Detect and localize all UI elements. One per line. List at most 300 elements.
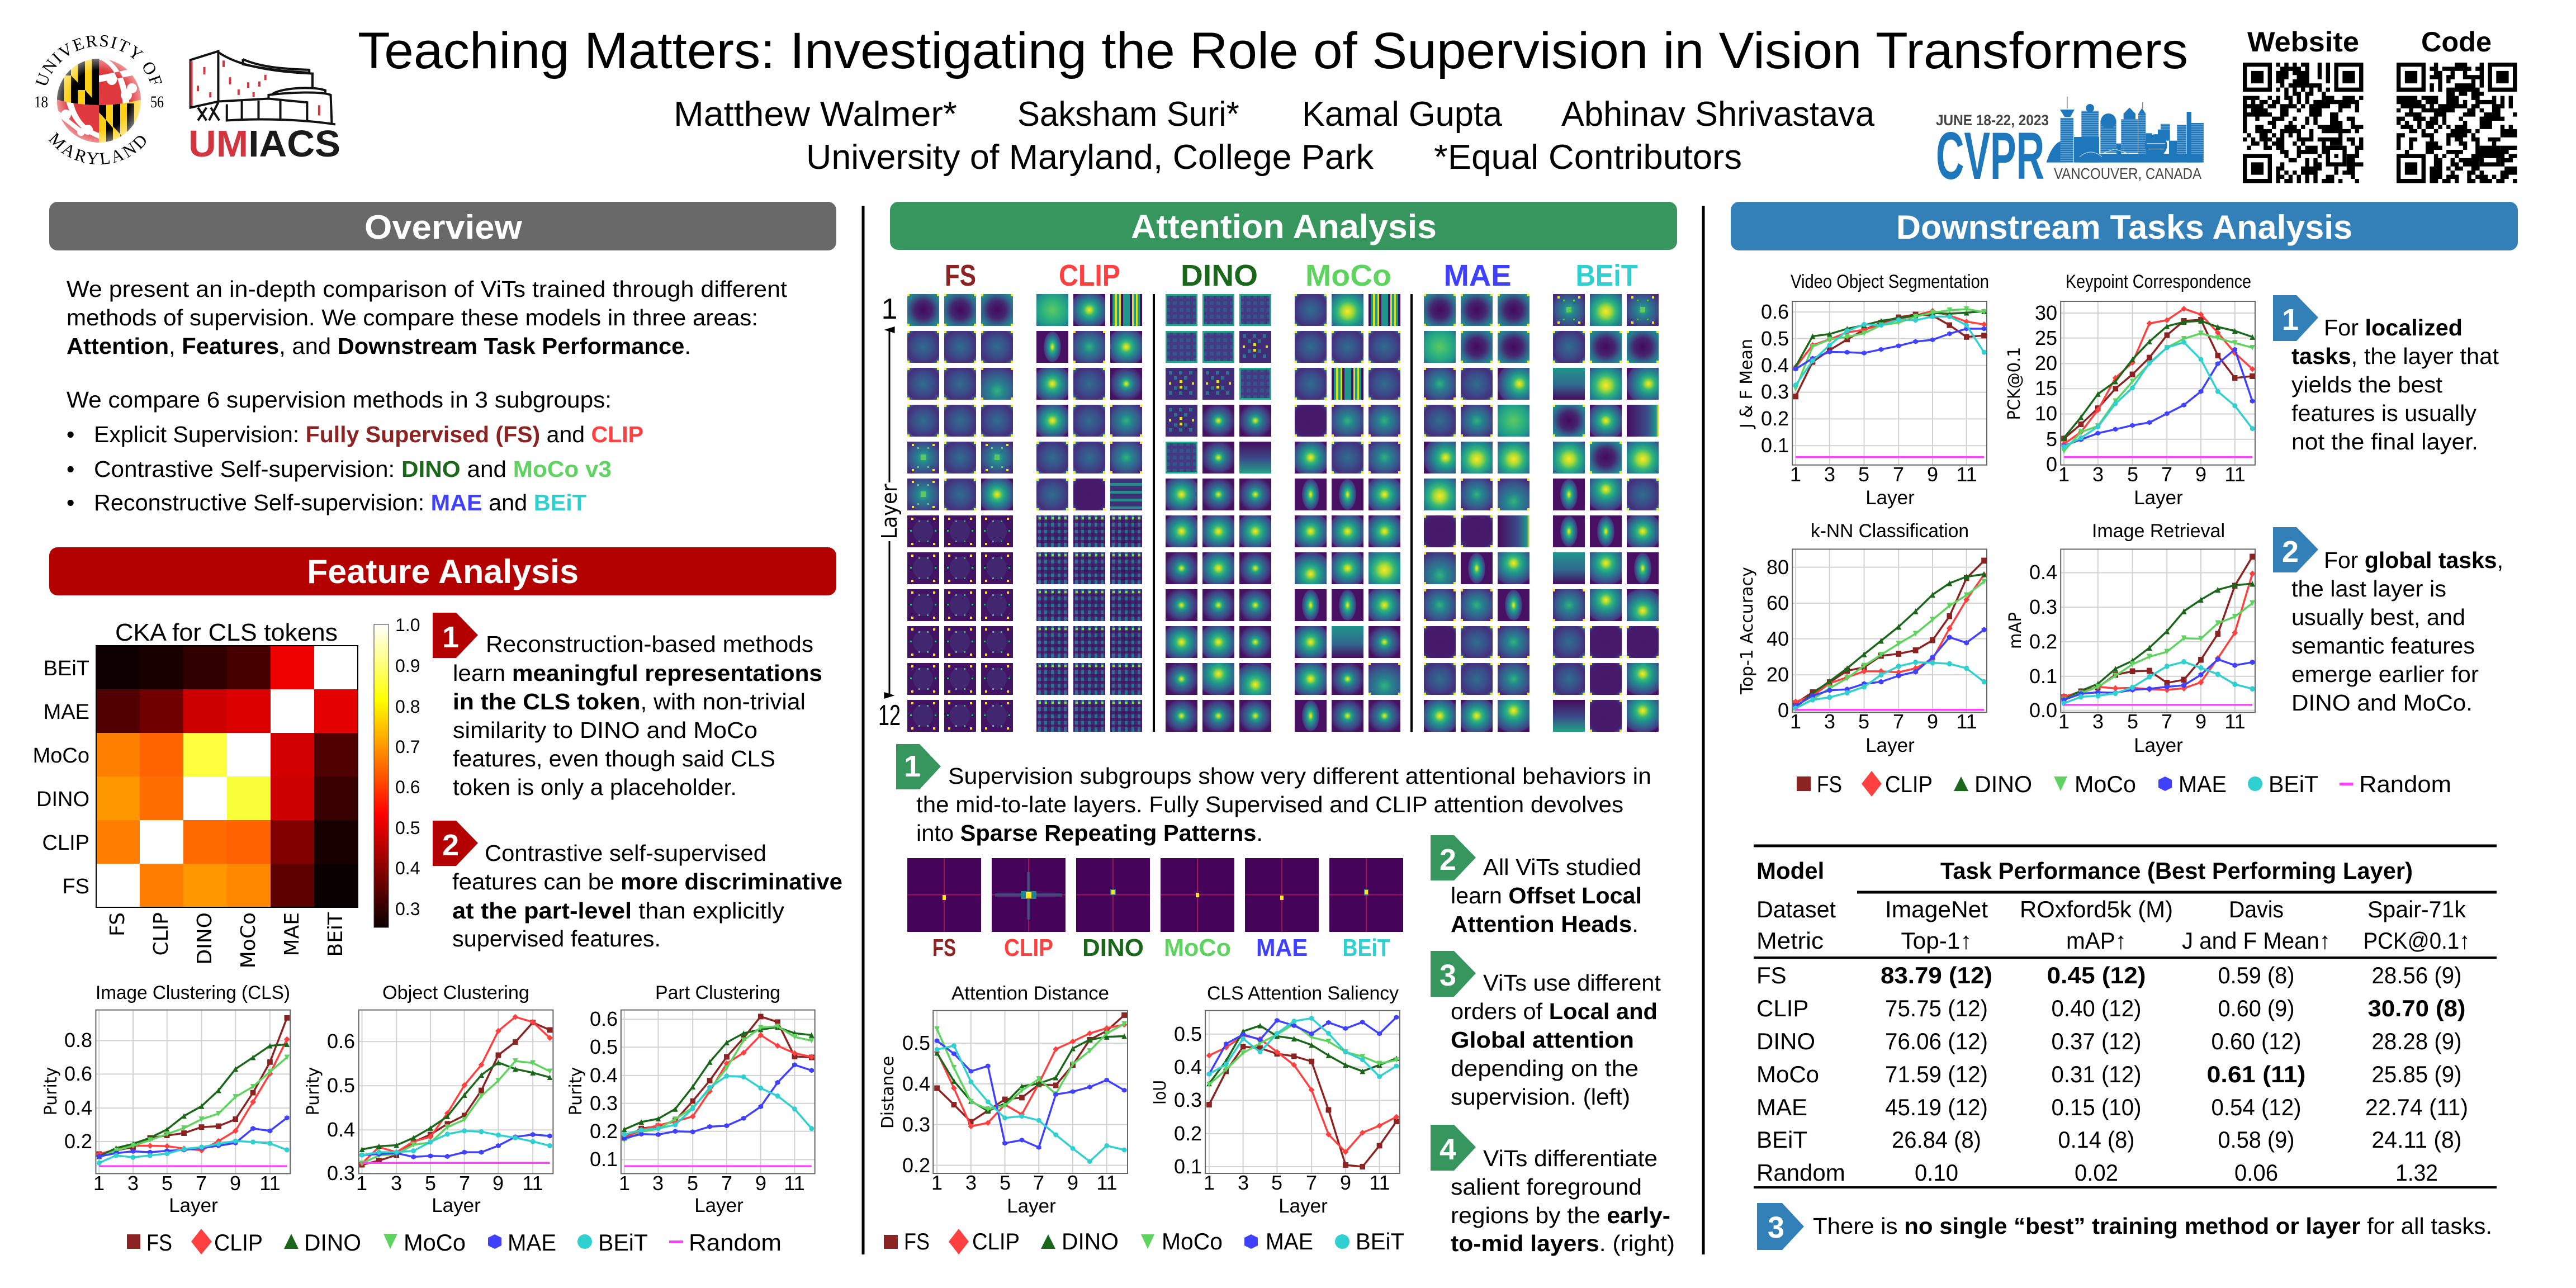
legend: attention charts: MoCo (1162, 1228, 1223, 1254)
heading: Downstream Tasks Analysis: Downstream Tasks Analysis (1896, 209, 2352, 246)
colorbar (374, 615, 420, 927)
divider: MoCo / MAE (1410, 294, 1413, 732)
affiliations (806, 138, 1742, 177)
layer axis arrow: 12 (878, 699, 901, 732)
table: task performance: Random (1756, 1159, 1845, 1186)
callout 2: global tasks: the last layer is (2291, 576, 2446, 602)
table: task performance: 24.11 (8) (2371, 1126, 2462, 1153)
text block: supervision subgroups: We compare 6 supervision methods in 3 subgroups: (67, 387, 612, 413)
chart: k-NN Classification: 40 (1767, 627, 1789, 650)
text block: supervision subgroups: • (67, 490, 74, 515)
logo: University of Maryland seal: UNIVERSITY OF (35, 35, 162, 85)
chart: CLS Attention Saliency: CLS Attention Saliency (1207, 983, 1399, 1004)
chart: Image Clustering (CLS): Image Clustering (CLS) (96, 982, 290, 1003)
layer axis arrow (877, 293, 902, 732)
chart: Attention Distance: 11 (1096, 1171, 1117, 1194)
chart: Keypoint Correspondence: 3 (2092, 463, 2104, 486)
callout 4: salient foreground: regions by the early- (1451, 1202, 1670, 1228)
chart: Image Retrieval: Layer (2134, 735, 2183, 756)
legend: downstream charts (1797, 771, 2451, 797)
heatmap: CKA for CLS tokens: DINO (193, 912, 216, 965)
callout 1: CLS token: similarity to DINO and MoCo (453, 717, 757, 743)
legend: feature charts: DINO (304, 1229, 361, 1256)
heatmap: CKA for CLS tokens: FS (106, 912, 129, 936)
heatmap: CKA for CLS tokens: MoCo (237, 912, 260, 968)
column dividers (863, 206, 1703, 1254)
table: task performance: DINO (1756, 1028, 1815, 1054)
chart: Attention Distance: Attention Distance (951, 983, 1109, 1004)
chart: CLS Attention Saliency: 9 (1340, 1171, 1351, 1194)
callout 2: part-level: features can be more discriminative (452, 869, 842, 894)
affiliations: University of Maryland, College Park (806, 138, 1374, 177)
callout 1: CLS token: 1 (442, 621, 459, 654)
chart: Image Clustering (CLS) (41, 982, 290, 1216)
chart: CLS Attention Saliency: Layer (1278, 1195, 1328, 1217)
affiliations: *Equal Contributors (1434, 138, 1742, 177)
chart: Image Clustering (CLS): 0.2 (64, 1130, 92, 1153)
callout 2: offset local attention heads (1431, 835, 1642, 937)
callout 4: salient foreground: 4 (1439, 1133, 1456, 1166)
legend: downstream charts: FS (1817, 771, 1842, 797)
chart: Image Clustering (CLS): Layer (169, 1195, 218, 1216)
heading: Feature Analysis: Feature Analysis (307, 553, 579, 590)
chart: k-NN Classification: 11 (1956, 710, 1977, 733)
chart: Attention Distance: 0.4 (902, 1072, 930, 1095)
callout 3: local and global attention: ViTs use different (1483, 970, 1661, 996)
legend: downstream charts: DINO (1974, 771, 2032, 797)
heatmap: CKA for CLS tokens: BEiT (44, 657, 89, 680)
chart: Keypoint Correspondence (2005, 271, 2255, 509)
chart: Part Clustering: 0.6 (590, 1007, 618, 1030)
table: task performance: 71.59 (12) (1885, 1061, 1988, 1087)
table: task performance: 0.60 (12) (2212, 1028, 2301, 1054)
chart: Keypoint Correspondence: 20 (2035, 352, 2057, 375)
chart: Attention Distance: 1 (931, 1171, 943, 1194)
legend: feature charts: MAE (508, 1229, 556, 1256)
chart: Keypoint Correspondence: 5 (2046, 428, 2057, 451)
chart: k-NN Classification: 60 (1767, 591, 1789, 614)
callout 2: part-level: at the part-level than explicitly (452, 898, 785, 924)
attention maps: CLIP (1036, 294, 1142, 732)
chart: CLS Attention Saliency: 0.2 (1174, 1122, 1202, 1145)
callout 2: offset local attention heads: Attention Heads. (1451, 911, 1639, 937)
table: task performance: Spair-71k (2367, 896, 2466, 922)
chart: k-NN Classification: 20 (1767, 663, 1789, 686)
chart: Part Clustering: 0.3 (590, 1092, 618, 1115)
chart: Image Clustering (CLS): Purity (41, 1067, 61, 1115)
callout 2: part-level: Contrastive self-supervised (485, 840, 766, 866)
table: task performance: 0.06 (2234, 1159, 2278, 1186)
chart: Image Retrieval: mAP (2006, 612, 2025, 649)
chart: Image Clustering (CLS): 9 (230, 1172, 241, 1195)
table: task performance: 30.70 (8) (2368, 995, 2465, 1021)
chart: Attention Distance: 7 (1033, 1171, 1044, 1194)
offset attention heads maps (907, 858, 1403, 932)
chart: Keypoint Correspondence: 0 (2046, 453, 2057, 476)
chart: CLS Attention Saliency: 0.1 (1174, 1155, 1202, 1178)
chart: Image Retrieval: 0.3 (2029, 595, 2057, 618)
table: task performance: 0.54 (12) (2212, 1094, 2301, 1120)
chart: Video Object Segmentation: 0.2 (1761, 407, 1789, 430)
callout 2: part-level: supervised features. (452, 926, 661, 951)
table: task performance: 22.74 (11) (2365, 1094, 2468, 1120)
authors: Abhinav Shrivastava (1561, 95, 1875, 134)
chart: k-NN Classification: 3 (1824, 710, 1835, 733)
callout 4: salient foreground: salient foreground (1451, 1174, 1642, 1200)
attention maps: DINO (1166, 294, 1271, 732)
text block: overview intro (67, 276, 788, 359)
chart: Attention Distance: 9 (1067, 1171, 1078, 1194)
chart: Attention Distance: 5 (1000, 1171, 1011, 1194)
chart: Video Object Segmentation: J & F Mean (1737, 339, 1756, 429)
table: task performance: 1.32 (2395, 1159, 2438, 1186)
chart: CLS Attention Saliency (1150, 983, 1400, 1217)
QR label: Code: Code (2421, 26, 2492, 58)
labels for head maps: DINO (1082, 934, 1144, 962)
callout 2: part-level (433, 821, 842, 951)
table: task performance: mAP↑ (2066, 927, 2127, 954)
text block: supervision subgroups: • (67, 422, 74, 447)
table: task performance: 0.45 (12) (2047, 962, 2146, 988)
legend: attention charts: CLIP (972, 1228, 1020, 1254)
callout 1: localized tasks: yields the best (2291, 372, 2443, 397)
table: task performance: 45.19 (12) (1885, 1094, 1988, 1120)
logo: CVPR 2023 Vancouver: CVPR (1936, 119, 2044, 193)
logo: University of Maryland seal: MARYLAND (48, 132, 146, 164)
attention maps: MAE (1424, 294, 1530, 732)
chart: Video Object Segmentation: 7 (1893, 463, 1904, 486)
heatmap: CKA for CLS tokens: CLIP (150, 912, 173, 956)
chart: Image Clustering (CLS): 5 (162, 1172, 173, 1195)
table: task performance: BEiT (1756, 1126, 1807, 1153)
chart: Part Clustering: 0.1 (590, 1148, 618, 1171)
chart: Image Clustering (CLS): 1 (93, 1172, 105, 1195)
table: task performance: MoCo (1756, 1061, 1819, 1087)
attention grid column labels: MoCo (1305, 259, 1391, 292)
divider: CLIP / DINO (1153, 294, 1155, 732)
chart: Image Retrieval: 0.0 (2029, 699, 2057, 722)
callout 1: localized tasks: 1 (2282, 303, 2299, 337)
table: task performance: J and F Mean↑ (2182, 927, 2331, 954)
callout 3: no single best: 3 (1768, 1211, 1784, 1244)
chart: Object Clustering: 5 (425, 1172, 436, 1195)
callout 2: global tasks: semantic features (2291, 633, 2475, 659)
panel: Overview (49, 202, 836, 515)
callout 1: sparse repeating patterns: the mid-to-late layers. Fully Supervised and CLIP attention devolves (916, 792, 1623, 817)
chart: Video Object Segmentation (1737, 271, 1989, 509)
table: task performance: 75.75 (12) (1885, 995, 1988, 1021)
chart: Attention Distance: 0.5 (902, 1031, 930, 1054)
chart: CLS Attention Saliency: 1 (1204, 1171, 1215, 1194)
chart: CLS Attention Saliency: 5 (1271, 1171, 1282, 1194)
heatmap: CKA for CLS tokens: DINO (36, 788, 89, 811)
legend: attention charts (884, 1228, 1404, 1254)
table: task performance: 28.28 (9) (2371, 1028, 2462, 1054)
table: task performance: 28.56 (9) (2371, 962, 2462, 988)
table: task performance: Davis (2229, 896, 2284, 922)
legend: attention charts: MAE (1266, 1228, 1313, 1254)
logo: CVPR 2023 Vancouver: VANCOUVER, CANADA (2054, 165, 2201, 182)
callout 2: offset local attention heads: learn Offset Local (1451, 883, 1642, 908)
chart: Image Clustering (CLS): 7 (196, 1172, 207, 1195)
panel: Feature Analysis (33, 547, 842, 1256)
callout 1: CLS token: Reconstruction-based methods (486, 631, 813, 657)
panel: Attention Analysis (877, 202, 1677, 1256)
table: task performance: ImageNet (1885, 896, 1988, 922)
table: task performance: Dataset (1756, 896, 1836, 922)
chart: Object Clustering: 7 (459, 1172, 470, 1195)
chart: CLS Attention Saliency: 0.4 (1174, 1055, 1202, 1078)
callout 1: CLS token: token is only a placeholder. (453, 774, 737, 800)
chart: Keypoint Correspondence: 25 (2035, 326, 2057, 349)
authors (674, 95, 1875, 134)
QR label: Website: Website (2247, 26, 2359, 58)
callout 3: local and global attention: 3 (1439, 959, 1456, 992)
chart: Part Clustering: 0.4 (590, 1064, 618, 1087)
callout 2: global tasks: usually best, and (2291, 604, 2465, 630)
text block: supervision subgroups: • (67, 456, 74, 482)
table: task performance: 0.37 (12) (2052, 1028, 2141, 1054)
callout 2: global tasks (2273, 527, 2503, 716)
chart: Attention Distance: 0.2 (902, 1154, 930, 1177)
chart: CLS Attention Saliency: 7 (1306, 1171, 1317, 1194)
chart: CLS Attention Saliency: 0.5 (1174, 1022, 1202, 1045)
heatmap: CKA for CLS tokens: CKA for CLS tokens (115, 619, 338, 646)
authors: Matthew Walmer* (674, 95, 957, 134)
chart: Part Clustering: 11 (784, 1172, 805, 1195)
chart: Object Clustering: 0.4 (327, 1118, 355, 1141)
chart: Image Retrieval: 7 (2161, 710, 2172, 733)
chart: Part Clustering: 3 (652, 1172, 664, 1195)
chart: Image Retrieval: Image Retrieval (2092, 520, 2225, 542)
authors: Kamal Gupta (1302, 95, 1503, 134)
callout 3: local and global attention: depending on the (1451, 1055, 1639, 1081)
chart: Image Retrieval: 0.4 (2029, 561, 2057, 584)
attention grid column labels: FS (945, 259, 976, 292)
table: task performance: 0.31 (12) (2052, 1061, 2141, 1087)
chart: Keypoint Correspondence: 9 (2195, 463, 2206, 486)
chart: Object Clustering (304, 982, 553, 1216)
chart: Attention Distance: 0.3 (902, 1113, 930, 1136)
legend: downstream charts: Random (2359, 771, 2451, 797)
labels for head maps: FS (932, 934, 956, 962)
chart: Keypoint Correspondence: PCK@0.1 (2005, 347, 2024, 420)
chart: Part Clustering: 9 (755, 1172, 766, 1195)
chart: k-NN Classification: Layer (1865, 735, 1915, 756)
chart: Video Object Segmentation: 9 (1927, 463, 1938, 486)
table: task performance: 0.10 (1915, 1159, 1958, 1186)
table: task performance: 0.60 (9) (2218, 995, 2294, 1021)
text block: supervision subgroups: Contrastive Self-supervision: DINO and MoCo v3 (94, 456, 612, 482)
text block: supervision subgroups: Reconstructive Self-supervision: MAE and BEiT (94, 490, 586, 515)
title: Teaching Matters: Investigating the Role of Supervision in Vision Transformers (358, 22, 2188, 79)
legend: downstream charts: CLIP (1885, 771, 1933, 797)
chart: Keypoint Correspondence: 10 (2035, 402, 2057, 425)
callout 1: sparse repeating patterns: 1 (904, 750, 921, 783)
chart: Image Retrieval: 9 (2195, 710, 2206, 733)
heading: Downstream Tasks Analysis (1731, 202, 2518, 250)
callout 1: CLS token: features, even though said CLS (453, 746, 775, 771)
table: task performance (1754, 846, 2497, 1187)
legend: attention charts: DINO (1062, 1228, 1119, 1254)
table: task performance: 0.02 (2075, 1159, 2118, 1186)
QR code: Code (2397, 63, 2517, 183)
authors: Saksham Suri* (1017, 95, 1239, 134)
heatmap: CKA for CLS tokens (33, 619, 358, 968)
chart: Object Clustering: Purity (304, 1067, 323, 1115)
callout 2: global tasks: DINO and MoCo. (2291, 690, 2473, 716)
legend: feature charts: MoCo (404, 1229, 466, 1256)
heatmap: CKA for CLS tokens: CLIP (42, 831, 89, 855)
logo: University of Maryland seal: 18 (34, 93, 48, 111)
callout 1: localized tasks: For localized (2324, 315, 2463, 340)
heading: Attention Analysis (890, 202, 1677, 250)
chart: Video Object Segmentation: 1 (1790, 463, 1801, 486)
chart: Part Clustering: 0.2 (590, 1120, 618, 1143)
chart: k-NN Classification: 7 (1893, 710, 1904, 733)
text block: overview intro: methods of supervision. We compare these models in three areas: (67, 305, 758, 330)
chart: Attention Distance: Distance (878, 1056, 898, 1129)
chart: Video Object Segmentation: 3 (1824, 463, 1835, 486)
legend: attention charts: FS (904, 1228, 930, 1254)
legend: feature charts: Random (689, 1229, 782, 1256)
chart: k-NN Classification (1737, 520, 1987, 756)
chart: Image Clustering (CLS): 0.4 (64, 1096, 92, 1119)
callout 3: no single best (1757, 1203, 2492, 1250)
attention grid column labels: DINO (1181, 259, 1258, 292)
table: task performance: 0.58 (9) (2218, 1126, 2294, 1153)
callout 1: localized tasks: tasks, the layer that (2291, 343, 2499, 369)
text block: supervision subgroups (67, 387, 643, 515)
callout 1: CLS token (433, 613, 822, 800)
QR code: Website (2243, 63, 2363, 183)
legend: feature charts: CLIP (214, 1229, 263, 1256)
chart: Image Clustering (CLS): 0.8 (64, 1029, 92, 1052)
chart: Part Clustering: 5 (687, 1172, 698, 1195)
chart: k-NN Classification: 5 (1858, 710, 1869, 733)
callout 2: offset local attention heads: 2 (1439, 843, 1456, 877)
chart: Image Retrieval (2006, 520, 2255, 756)
logo: CVPR 2023 Vancouver: JUNE 18-22, 2023 (1936, 112, 2049, 129)
chart: Video Object Segmentation: 0.5 (1761, 327, 1789, 350)
legend: attention charts: BEiT (1356, 1228, 1404, 1254)
heatmap: CKA for CLS tokens: MAE (44, 700, 89, 724)
chart: Video Object Segmentation: 5 (1858, 463, 1869, 486)
logo: CVPR 2023 Vancouver (1936, 97, 2204, 193)
chart: Keypoint Correspondence: 30 (2035, 301, 2057, 324)
layer axis arrow: 1 (882, 293, 897, 325)
chart: Keypoint Correspondence: 11 (2224, 463, 2246, 486)
chart: Image Retrieval: 0.2 (2029, 630, 2057, 653)
chart: Object Clustering: Object Clustering (382, 982, 529, 1003)
heading: Overview (49, 202, 836, 250)
chart: Keypoint Correspondence: Keypoint Correspondence (2066, 271, 2251, 292)
chart: Video Object Segmentation: 0.6 (1761, 300, 1789, 323)
callout 3: local and global attention: Global attention (1451, 1027, 1634, 1053)
table: task performance: 0.40 (12) (2052, 995, 2141, 1021)
chart: Video Object Segmentation: Video Object Segmentation (1791, 271, 1989, 292)
callout 1: localized tasks: not the final layer. (2291, 429, 2478, 454)
attention maps: FS (907, 294, 1013, 732)
chart: Image Retrieval: 11 (2224, 710, 2246, 733)
callout 2: part-level: 2 (442, 828, 459, 862)
chart: k-NN Classification: Top-1 Accuracy (1737, 567, 1757, 695)
chart: Part Clustering: Layer (694, 1195, 744, 1216)
callout 2: offset local attention heads: All ViTs studied (1483, 854, 1641, 880)
chart: Part Clustering: Purity (566, 1067, 586, 1115)
table: task performance: PCK@0.1↑ (2364, 927, 2470, 954)
chart: Part Clustering: 7 (721, 1172, 732, 1195)
table: task performance: CLIP (1756, 995, 1808, 1021)
heading: Attention Analysis: Attention Analysis (1131, 208, 1437, 245)
text block: overview intro: Attention, Features, and Downstream Task Performance . (67, 333, 691, 359)
heatmap: CKA for CLS tokens: MAE (281, 912, 304, 956)
chart: Part Clustering (566, 982, 815, 1216)
logo: University of Maryland seal (34, 35, 164, 164)
colorbar: 0.8 (395, 697, 420, 717)
callout 4: salient foreground: to-mid layers . (right) (1451, 1230, 1675, 1256)
table: task performance: ROxford5k (M) (2020, 896, 2173, 922)
chart: Object Clustering: 0.5 (327, 1074, 355, 1097)
table: task performance: 76.06 (12) (1885, 1028, 1988, 1054)
chart: CLS Attention Saliency: 0.3 (1174, 1088, 1202, 1111)
chart: k-NN Classification: 0 (1778, 699, 1789, 722)
heatmap: CKA for CLS tokens: FS (62, 875, 89, 898)
table: task performance: 0.59 (8) (2218, 962, 2294, 988)
chart: Image Clustering (CLS): 3 (127, 1172, 139, 1195)
chart: Part Clustering: 0.5 (590, 1035, 618, 1058)
chart: k-NN Classification: k-NN Classification (1811, 520, 1969, 542)
logo: University of Maryland seal: 56 (150, 93, 164, 111)
chart: Image Clustering (CLS): 11 (259, 1172, 281, 1195)
callout 2: global tasks: emerge earlier for (2291, 661, 2479, 687)
colorbar: 0.5 (395, 818, 420, 838)
attention grid column labels (945, 259, 1638, 292)
callout 3: no single best: There is no single “best” training method or layer for all tasks. (1813, 1213, 2492, 1239)
callout 3: local and global attention: supervision. (left) (1451, 1084, 1630, 1110)
chart: Object Clustering: 3 (391, 1172, 402, 1195)
table: task performance: 0.14 (8) (2058, 1126, 2134, 1153)
chart: Video Object Segmentation: 0.4 (1761, 354, 1789, 377)
chart: Keypoint Correspondence: 7 (2161, 463, 2172, 486)
chart: Keypoint Correspondence: Layer (2134, 487, 2183, 509)
text block: supervision subgroups: Explicit Supervision: Fully Supervised (FS) and CLIP (94, 422, 643, 447)
chart: Keypoint Correspondence: 5 (2127, 463, 2138, 486)
callout 2: global tasks: For global tasks, (2324, 547, 2503, 573)
colorbar: 0.9 (395, 656, 420, 676)
callout 1: sparse repeating patterns: Supervision subgroups show very different attentional behaviors in (948, 763, 1651, 789)
labels for head maps (932, 934, 1390, 962)
panel: Downstream Tasks Analysis (1731, 202, 2518, 1250)
chart: CLS Attention Saliency: 11 (1369, 1171, 1390, 1194)
legend: downstream charts: MAE (2179, 771, 2227, 797)
callout 1: localized tasks (2273, 295, 2499, 454)
attention maps: MoCo (1295, 294, 1400, 732)
chart: k-NN Classification: 80 (1767, 556, 1789, 579)
chart: Object Clustering: 9 (493, 1172, 504, 1195)
chart: Part Clustering: 1 (619, 1172, 630, 1195)
chart: CLS Attention Saliency: IoU (1150, 1080, 1170, 1105)
heatmap: CKA for CLS tokens: MoCo (33, 744, 89, 768)
labels for head maps: MAE (1256, 934, 1308, 962)
callout 1: CLS token: in the CLS token , with non-trivial (453, 689, 806, 714)
chart: Video Object Segmentation: 11 (1956, 463, 1977, 486)
colorbar: 1.0 (395, 615, 420, 635)
chart: Video Object Segmentation: 0.1 (1761, 434, 1789, 457)
chart: Image Retrieval: 1 (2058, 710, 2070, 733)
table: task performance: MAE (1756, 1094, 1807, 1120)
chart: Attention Distance: 3 (965, 1171, 977, 1194)
